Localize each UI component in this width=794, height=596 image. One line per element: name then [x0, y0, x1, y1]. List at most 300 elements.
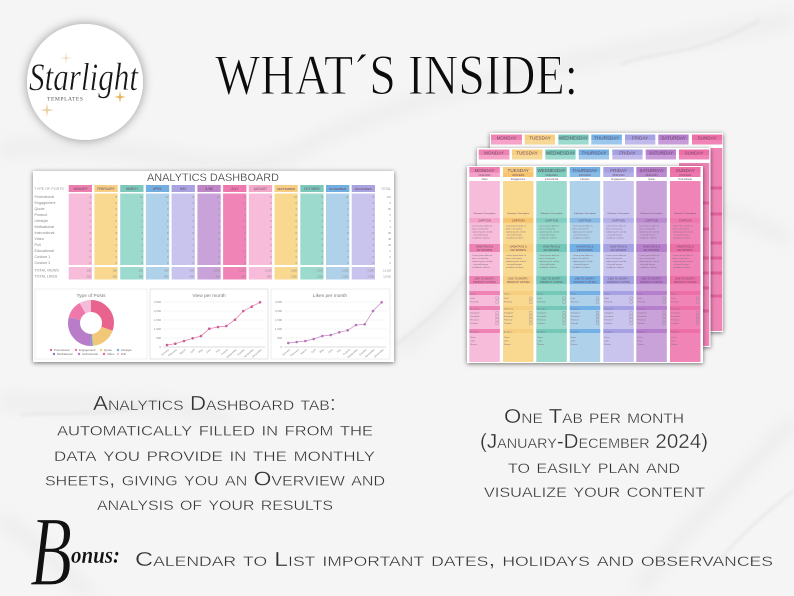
column: Monday: Pinterest	[470, 318, 479, 322]
column: Sunday: incididunt ut labore	[673, 236, 691, 240]
monthly post counts: 8	[270, 195, 272, 199]
column: Friday: incididunt ut labore	[606, 236, 625, 240]
column: Monday: MONDAY	[475, 168, 494, 173]
column: Tuesday: Filename / Description	[507, 212, 530, 215]
panel: back calendar sheet: TUESDAY	[529, 135, 551, 140]
column: Tuesday: Shared to	[504, 307, 514, 310]
column: Saturday: Lorem ipsum dolor sit	[639, 224, 660, 228]
panel: likes line chart: 1,500	[275, 318, 282, 322]
panel: back calendar sheet: WEDNESDAY	[559, 135, 588, 140]
row labels: Engagement	[34, 201, 55, 205]
monthly post counts: 0	[373, 201, 375, 205]
monthly post counts: 0	[244, 261, 246, 265]
column: Wednesday: WEDNESDAY	[538, 168, 566, 173]
total column and totals: 800	[241, 274, 246, 278]
panel: middle calendar sheet: SUNDAY	[685, 150, 703, 155]
monthly post counts: 8	[296, 231, 298, 235]
column: Saturday: amet, consectetur	[639, 257, 656, 260]
total column and totals: 1,200	[290, 274, 298, 278]
column: Sunday: Filename / Description	[674, 212, 697, 215]
panel: views line chart: 1,000	[154, 327, 161, 331]
monthly post counts: 0	[219, 201, 221, 205]
month columns: JANUARY	[73, 187, 89, 191]
column: Monday: eiusmod tempor	[473, 234, 489, 236]
monthly post counts: 4	[193, 207, 195, 211]
text block: analytics description: automatically filled in from the	[57, 419, 373, 441]
monthly post counts: 0	[270, 261, 272, 265]
monthly post counts: 4	[296, 243, 298, 247]
panel: back calendar sheet	[490, 133, 723, 332]
column: Thursday: PRODUCT LISTING	[574, 281, 596, 284]
column: Thursday: Shares	[571, 343, 577, 346]
column: Thursday: Lorem ipsum dolor sit	[573, 254, 593, 257]
column: Wednesday: LINK TO SHORT /	[541, 278, 562, 280]
monthly post counts: 1	[390, 225, 392, 229]
column: Friday: Engagement	[611, 178, 626, 181]
monthly post counts: 0	[322, 201, 324, 205]
column: Sunday: CAPTION	[679, 218, 692, 222]
column: Sunday: HASHTAGS &	[677, 244, 694, 248]
row labels: TYPE OF POSTS	[34, 187, 64, 191]
column: Monday: 01/01/2024	[479, 174, 491, 177]
column: Tuesday: Status	[504, 292, 510, 295]
month columns: APRIL	[153, 187, 162, 191]
total column and totals: 1,100	[239, 268, 246, 272]
monthly post counts: 4	[390, 219, 392, 223]
row labels: Promotional	[34, 195, 54, 199]
monthly post counts: 0	[219, 261, 221, 265]
row labels: Video	[34, 237, 44, 241]
monthly post counts: 0	[322, 213, 324, 217]
monthly post counts: 8	[193, 231, 195, 235]
panel: likes line chart: 1,000	[275, 327, 282, 331]
monthly post counts: 0	[347, 261, 349, 265]
monthly post counts: 4	[90, 219, 92, 223]
month columns	[69, 185, 375, 280]
total column and totals: 13,150	[383, 268, 392, 272]
column: Saturday: Quote	[648, 178, 656, 181]
column: Thursday: eiusmod tempor	[574, 234, 589, 236]
column: Friday: Pinterest	[604, 318, 613, 322]
row labels: Lifestyle	[34, 219, 48, 223]
column: Friday: PRODUCT LISTING	[607, 281, 630, 284]
monthly post counts: 4	[116, 243, 118, 247]
monthly post counts: 8	[219, 231, 221, 235]
column: Thursday: Lorem ipsum dolor sit	[573, 224, 593, 228]
month columns: OCTOBER	[304, 187, 320, 191]
column: Friday: Likes	[604, 340, 609, 342]
column: Friday: Youtube	[604, 322, 613, 325]
column: Monday: Instagram	[470, 312, 480, 314]
text block: monthly tabs description	[480, 406, 708, 502]
monthly post counts: 8	[116, 195, 118, 199]
column: Monday: adipiscing elit, sed do	[472, 230, 493, 234]
panel: middle calendar sheet: SATURDAY	[649, 150, 673, 155]
donut legend: Quote	[104, 348, 112, 352]
monthly post counts: 0	[116, 219, 118, 223]
column: Sunday: adipiscing elit, sed do	[673, 230, 694, 234]
panel: views line chart: 500	[156, 336, 161, 340]
monthly post counts: 0	[270, 255, 272, 259]
monthly post counts: 4	[347, 243, 349, 247]
monthly post counts: 4	[244, 237, 246, 241]
row labels: Motivational	[34, 225, 54, 229]
monthly post counts: 4	[116, 207, 118, 211]
column: Friday: Shares	[604, 343, 611, 346]
monthly post counts: 4	[167, 237, 169, 241]
panel: likes line chart: November	[364, 348, 376, 358]
panel: likes line chart: December	[373, 348, 385, 358]
monthly post counts: 0	[296, 255, 298, 259]
bonus description: Calendar to List important dates, holidays and observances	[135, 549, 773, 571]
logo sparkles	[40, 51, 126, 117]
monthly post counts: 4	[116, 237, 118, 241]
column: Monday: Lorem ipsum dolor sit	[472, 254, 493, 257]
panel: likes line chart: August	[342, 348, 351, 356]
column: Saturday: Pinterest	[637, 318, 646, 322]
monthly post counts: 0	[193, 213, 195, 217]
bonus label: onus:	[71, 543, 120, 569]
monthly post counts: 5	[390, 201, 392, 205]
panel: likes line chart: 2,500	[275, 300, 282, 304]
column: Tuesday: Instagram	[504, 312, 514, 314]
monthly post counts: 0	[244, 213, 246, 217]
column: Thursday: Youtube	[571, 322, 579, 325]
column: Friday: Lorem ipsum dolor sit	[606, 224, 627, 228]
column: Thursday: Instagram	[571, 312, 580, 314]
column: Monday: Youtube	[470, 322, 479, 325]
monthly post counts: 0	[244, 255, 246, 259]
panel: back calendar sheet: SUNDAY	[698, 135, 716, 140]
monthly post counts: 0	[322, 225, 324, 229]
column: Sunday: Views	[671, 337, 677, 339]
column: Monday: Finished	[470, 302, 479, 304]
column: Saturday: incididunt ut labore	[639, 236, 658, 240]
monthly post counts: 3	[142, 243, 144, 247]
panel: likes line chart: January	[281, 347, 291, 357]
monthly post counts: 50	[388, 207, 392, 211]
column: Monday	[469, 167, 500, 362]
monthly post counts: 4	[322, 237, 324, 241]
column: Thursday: adipiscing elit, sed do	[573, 260, 593, 263]
monthly post counts: 43	[388, 243, 392, 247]
column: Thursday: Shared to	[571, 307, 581, 310]
monthly post counts: 0	[167, 219, 169, 223]
total column and totals	[87, 187, 392, 278]
total column and totals: 2,000	[342, 274, 349, 278]
panel: middle calendar sheet: FRIDAY	[619, 150, 636, 155]
total column and totals: 900	[267, 274, 272, 278]
column: Saturday: incididunt ut labore	[639, 266, 658, 269]
column: Sunday: Analyses	[671, 330, 679, 333]
column: Friday: adipiscing elit, sed do	[606, 260, 627, 263]
monthly post counts: 4	[373, 237, 375, 241]
column: Sunday: eiusmod tempor	[674, 234, 689, 236]
monthly post counts: 0	[322, 219, 324, 223]
donut legend: Promotional	[54, 348, 70, 352]
panel: middle calendar sheet: THURSDAY	[582, 150, 606, 155]
column: Tuesday: Engagement	[511, 178, 526, 181]
panel: views line chart: June	[205, 347, 212, 354]
panel: likes line chart: 0	[280, 345, 282, 349]
panel: views line chart: April	[189, 347, 196, 354]
panel: likes line chart	[271, 289, 390, 359]
column: Tuesday: Likes	[504, 340, 509, 342]
column: Sunday: Draft	[671, 297, 676, 300]
column: Tuesday: Analyses	[504, 330, 512, 333]
monthly post counts: 0	[167, 225, 169, 229]
monthly post counts: 4	[167, 243, 169, 247]
monthly post counts: 0	[373, 261, 375, 265]
column: Saturday: Finished	[637, 302, 646, 304]
donut legend: Video	[107, 352, 115, 356]
panel: back calendar sheet: FRIDAY	[632, 135, 648, 140]
column: Wednesday: Shared to	[537, 307, 547, 310]
monthly post counts: 8	[347, 231, 349, 235]
column: Friday: incididunt ut labore	[606, 266, 625, 269]
monthly post counts: 0	[142, 249, 144, 253]
column: Sunday: Pinterest	[671, 318, 680, 322]
monthly post counts: 0	[296, 201, 298, 205]
column: Sunday: Finished	[671, 302, 680, 304]
panel: middle calendar sheet: TUESDAY	[516, 150, 538, 155]
column: Thursday: KEYWORDS	[577, 248, 593, 252]
donut legend: Lifestyle	[121, 348, 132, 352]
column: Thursday: Analyses	[571, 330, 579, 333]
total column and totals: 1,250	[316, 274, 324, 278]
monthly post counts: 0	[270, 225, 272, 229]
column: Friday: Views	[604, 337, 610, 339]
total column and totals: 2,200	[342, 268, 349, 272]
text block: monthly tabs description: (January-December 2024)	[480, 431, 708, 453]
column: Saturday: adipiscing elit, sed do	[639, 230, 660, 234]
dashboard heading: ANALYTICS DASHBOARD	[147, 172, 279, 184]
monthly post counts: 0	[347, 219, 349, 223]
monthly post counts: 8	[244, 195, 246, 199]
monthly post counts: 0	[296, 213, 298, 217]
panel: views line chart	[150, 289, 268, 359]
monthly post counts: 0	[90, 213, 92, 217]
panel: views line chart: December	[251, 348, 263, 358]
column: Wednesday: Lorem ipsum dolor sit	[539, 254, 560, 257]
panel: views line chart: 1,500	[154, 318, 161, 322]
panel: views line chart: July	[215, 347, 221, 354]
monthly post counts: 8	[373, 195, 375, 199]
column: Saturday: eiusmod tempor	[640, 234, 656, 236]
monthly post counts: 0	[142, 219, 144, 223]
back sheet visible sunday column	[692, 148, 722, 331]
column: Thursday	[570, 167, 600, 362]
monthly post counts: 0	[142, 213, 144, 217]
monthly post counts: 0	[322, 249, 324, 253]
donut legend: Engagement	[79, 348, 96, 352]
column: Tuesday: TUESDAY	[508, 168, 529, 173]
total column and totals: 400	[164, 274, 169, 278]
monthly post counts: 4	[219, 207, 221, 211]
column: Wednesday: adipiscing elit, sed do	[539, 230, 560, 234]
column: Thursday: Filename / Description	[574, 212, 597, 215]
column: Thursday: Views	[571, 337, 576, 339]
monthly post counts: 3	[90, 207, 92, 211]
column: Sunday: Shared to	[671, 307, 681, 310]
column: Monday: amet, consectetur	[472, 228, 489, 230]
monthly post counts: 8	[193, 195, 195, 199]
monthly post counts: 0	[142, 225, 144, 229]
donut legend: Motivational	[57, 352, 73, 356]
column: Wednesday: Filename / Description	[541, 212, 563, 215]
column: Wednesday: eiusmod tempor	[540, 263, 556, 266]
monthly post counts: 0	[296, 219, 298, 223]
column: Friday: Facebook	[604, 316, 614, 318]
column: Friday: eiusmod tempor	[607, 263, 623, 266]
monthly post counts: 0	[347, 201, 349, 205]
total column and totals: 100	[87, 268, 92, 272]
text block: analytics description: sheets, giving you an Overview and	[45, 469, 385, 491]
column: Saturday: Filename / Description	[641, 212, 663, 215]
monthly post counts: 4	[347, 207, 349, 211]
total column and totals: 250	[113, 274, 118, 278]
monthly post counts: 0	[116, 225, 118, 229]
donut legend: Instructional	[82, 352, 98, 356]
column: Sunday: LINK TO SHORT /	[675, 278, 696, 280]
monthly post counts: 0	[116, 255, 118, 259]
column: Friday: FRIDAY	[610, 168, 627, 173]
column: Saturday: Status	[637, 292, 643, 295]
column: Friday: Filename / Description	[608, 212, 630, 215]
monthly post counts: 0	[270, 249, 272, 253]
column: Wednesday: Instagram	[537, 312, 547, 314]
monthly post counts: 0	[373, 225, 375, 229]
column: Saturday: eiusmod tempor	[640, 263, 656, 266]
monthly post counts: 0	[322, 255, 324, 259]
column: Sunday: Instagram	[671, 312, 681, 314]
month columns: NOVEMBER	[329, 187, 347, 191]
column: Friday: Draft	[604, 297, 609, 300]
panel: views line chart: 0	[159, 345, 161, 349]
panel: views line chart: View per month	[192, 293, 226, 299]
monthly post counts: 0	[142, 201, 144, 205]
monthly post counts: 0	[270, 213, 272, 217]
panel: likes line chart: May	[318, 347, 325, 354]
column: Thursday: CAPTION	[578, 218, 591, 222]
monthly post counts: 0	[167, 249, 169, 253]
column: Sunday: Lorem ipsum dolor sit	[673, 224, 693, 228]
column: Monday: Status	[470, 292, 476, 295]
column: Monday: Video	[481, 178, 488, 181]
monthly post counts: 0	[90, 249, 92, 253]
month columns: AUGUST	[254, 187, 267, 191]
monthly post counts: 4	[296, 207, 298, 211]
monthly post counts: 0	[193, 219, 195, 223]
monthly post counts: 0	[193, 201, 195, 205]
monthly post counts: 0	[167, 255, 169, 259]
monthly post counts: 0	[296, 225, 298, 229]
monthly post counts: 7	[270, 231, 272, 235]
monthly post counts: 0	[219, 225, 221, 229]
column: Saturday: CAPTION	[645, 218, 658, 222]
column: Friday: CAPTION	[612, 218, 625, 222]
column: Thursday: incididunt ut labore	[573, 236, 591, 240]
panel: likes line chart: October	[358, 348, 368, 357]
row labels: Poll	[34, 243, 41, 247]
donut legend: Poll	[121, 352, 126, 356]
column: Saturday: PRODUCT LISTING	[640, 281, 663, 284]
monthly post counts: 0	[244, 201, 246, 205]
column: Sunday: KEYWORDS	[677, 248, 693, 252]
column: Wednesday: incididunt ut labore	[539, 266, 558, 269]
monthly post counts: 0	[90, 255, 92, 259]
monthly post counts: 0	[373, 249, 375, 253]
donut legend	[50, 348, 132, 356]
column: Saturday: adipiscing elit, sed do	[639, 260, 660, 263]
column: Tuesday: adipiscing elit, sed do	[506, 230, 527, 234]
column: Sunday: adipiscing elit, sed do	[673, 260, 694, 263]
monthly post counts: 4	[219, 243, 221, 247]
column: Friday: 05/01/2024	[613, 174, 625, 177]
monthly post counts: 0	[116, 249, 118, 253]
panel: views line chart: May	[197, 347, 204, 354]
column: Wednesday: PRODUCT LISTING	[540, 281, 563, 284]
total column and totals: 1,150	[265, 268, 272, 272]
column: Saturday: Facebook	[637, 316, 647, 318]
column: Monday: Filename / Description	[474, 212, 496, 215]
monthly post counts: 0	[193, 261, 195, 265]
column: Wednesday: Instructional	[545, 178, 559, 181]
column: Thursday: Status	[571, 292, 577, 295]
column: Monday: Shared to	[470, 307, 480, 310]
total column and totals: 450	[164, 268, 169, 272]
column: Tuesday: amet, consectetur	[506, 257, 522, 260]
monthly post counts: 95	[388, 231, 392, 235]
panel: likes line chart: September	[346, 348, 359, 359]
row labels: Product	[34, 213, 47, 217]
column: Sunday: Promotional	[679, 178, 692, 181]
column: Wednesday: amet, consectetur	[539, 228, 556, 230]
panel: likes line chart: Likes per month	[313, 293, 347, 299]
monthly post counts: 4	[244, 207, 246, 211]
total column and totals: 2,000	[316, 268, 324, 272]
monthly post counts: 0	[193, 225, 195, 229]
total column and totals: 300	[139, 274, 144, 278]
column: Monday: adipiscing elit, sed do	[472, 260, 493, 263]
column: Friday: eiusmod tempor	[607, 234, 623, 236]
monthly post counts: 4	[270, 237, 272, 241]
text block: monthly tabs description: visualize your content	[484, 480, 706, 502]
monthly post counts: 101	[387, 195, 392, 199]
column: Friday: Lorem ipsum dolor sit	[606, 254, 627, 257]
month columns: SEPTEMBER	[277, 187, 296, 191]
monthly post counts: 10	[346, 195, 349, 199]
column: Tuesday	[503, 167, 534, 362]
column: Tuesday: Lorem ipsum dolor sit	[506, 254, 526, 257]
monthly post counts: 0	[116, 261, 118, 265]
monthly post counts: 4	[270, 243, 272, 247]
logo subtitle: TEMPLATES	[47, 96, 83, 102]
monthly post counts: 0	[347, 225, 349, 229]
panel: donut chart	[35, 289, 147, 359]
column: Tuesday: incididunt ut labore	[506, 266, 524, 269]
column: Saturday	[636, 167, 667, 362]
monthly post counts: 4	[219, 237, 221, 241]
monthly post counts: 0	[270, 219, 272, 223]
total column and totals: 1,000	[214, 268, 221, 272]
panel: likes line chart: 500	[277, 336, 282, 340]
column: Monday: Views	[470, 337, 476, 339]
column: Saturday: KEYWORDS	[644, 248, 660, 252]
text block: analytics description	[45, 393, 385, 515]
column: Saturday: HASHTAGS &	[643, 244, 660, 248]
monthly post counts: 0	[167, 261, 169, 265]
